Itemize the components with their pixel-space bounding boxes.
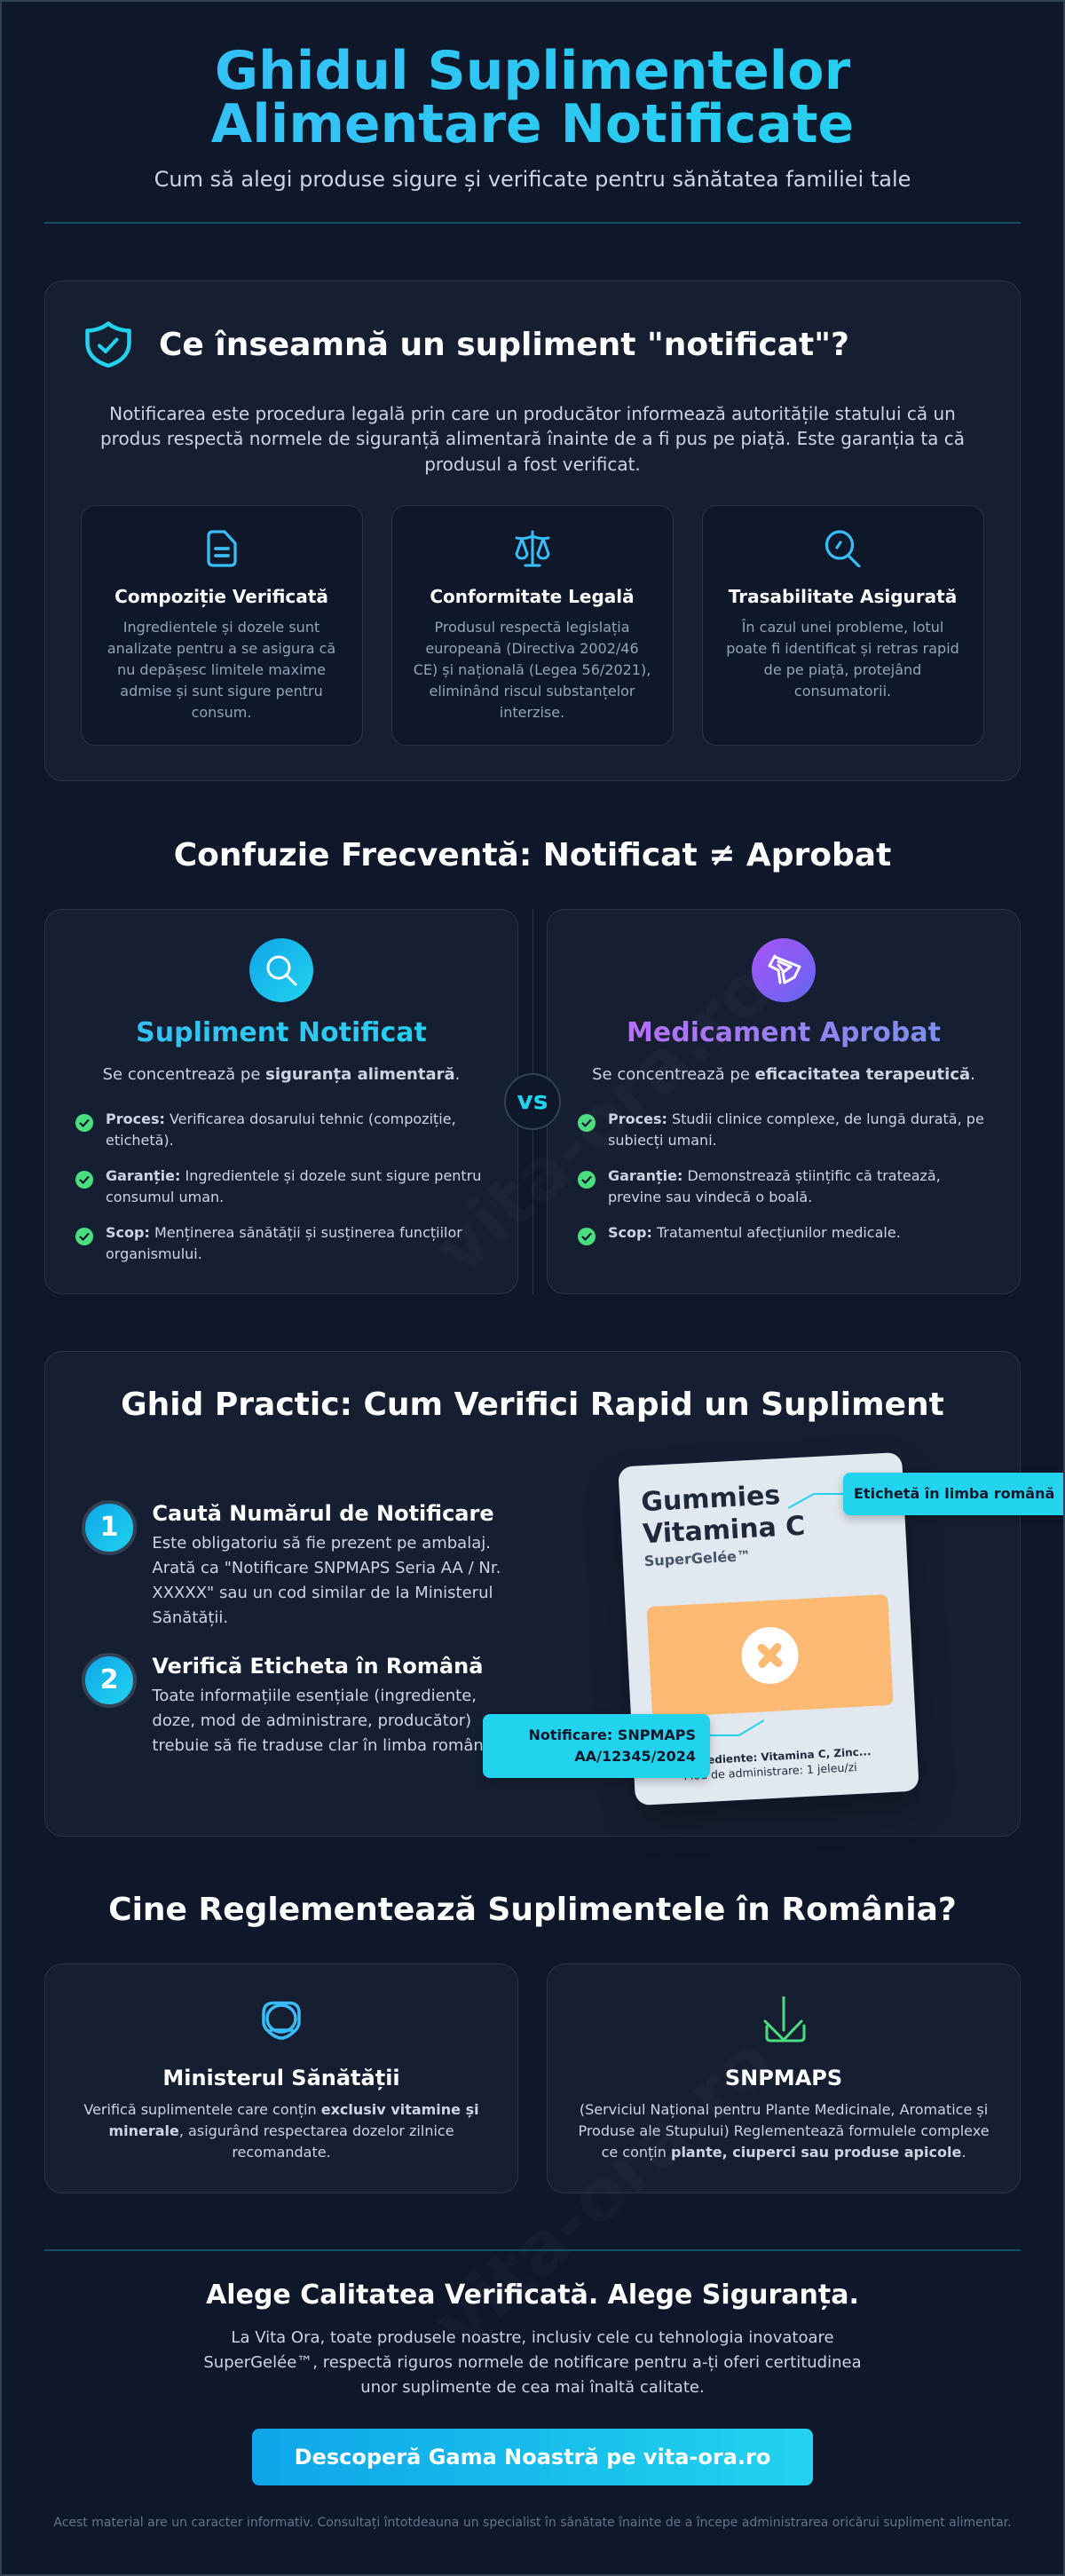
card text: Produsul respectă legislația <box>434 618 630 636</box>
step 2 text <box>152 1687 499 1755</box>
card text: analizate pentru a se asigura că <box>107 639 335 657</box>
step 1 text <box>152 1534 501 1627</box>
list item: purpose: Scop: Menținerea sănătății și susținerea funcțiilor <box>106 1223 462 1241</box>
card text: poate fi identificat și retras rapid <box>726 639 959 657</box>
card text: consumatorii. <box>794 682 891 699</box>
callout: notification number: AA/12345/2024 <box>574 1747 696 1765</box>
product label illustration <box>618 1452 919 1806</box>
product name: Gummies <box>640 1480 781 1518</box>
list item: process: etichetă). <box>106 1132 174 1149</box>
watermark top: vita-ora.ro <box>418 945 788 1291</box>
check icon 3 <box>578 1228 596 1245</box>
regulator text: Verifică suplimentele care conțin exclusiv vitamine și <box>83 2100 479 2118</box>
card: legal compliance <box>391 505 674 746</box>
product image placeholder <box>646 1594 893 1718</box>
icon: gummy badge <box>742 1627 799 1684</box>
list item: guarantee: Garanție: Ingredientele și dozele sunt sigure pentru <box>106 1166 481 1184</box>
list item: guarantee <box>106 1166 481 1205</box>
panel summary: Se concentrează pe siguranța alimentară. <box>103 1065 460 1084</box>
footer paragraph: SuperGelée™, respectă riguros normele de notificare pentru a-ți oferi certitudinea <box>203 2353 862 2372</box>
card text: consum. <box>192 703 251 721</box>
check icon 2 <box>578 1171 596 1189</box>
footer paragraph: unor suplimente de cea mai înaltă calitate. <box>360 2378 705 2397</box>
heading: practical guide: Ghid Practic: Cum Verifici Rapid un Supliment <box>121 1387 944 1422</box>
product name: Vitamina C <box>642 1510 806 1550</box>
call to action button: Descoperă Gama Noastră pe vita-ora.ro <box>295 2445 770 2469</box>
call to action button <box>252 2429 813 2485</box>
step 1 <box>82 1500 501 1627</box>
regulator text: Produse ale Stupului) Reglementează formulele complexe <box>578 2122 990 2139</box>
panel summary: Se concentrează pe eficacitatea terapeutică. <box>592 1065 975 1084</box>
card title: Compoziție Verificată <box>114 586 328 607</box>
check icon 2 <box>75 1171 93 1189</box>
regulator text <box>83 2100 479 2161</box>
footer paragraph: La Vita Ora, toate produsele noastre, inclusiv cele cu tehnologia inovatoare <box>231 2328 834 2347</box>
list item: process: Proces: Studii clinice complexe, de lungă durată, pe <box>608 1110 984 1127</box>
ingredients line: Ingrediente: Vitamina C, Zinc... <box>682 1745 871 1767</box>
callout: Romanian label <box>843 1473 1065 1515</box>
step 1 text: XXXXX" sau un cod similar de la Ministerul <box>152 1584 493 1602</box>
callout: notification number: Notificare: SNPMAPS <box>528 1726 696 1743</box>
card title: Trasabilitate Asigurată <box>729 586 957 607</box>
intro paragraph: produs respectă normele de siguranță alimentară înainte de a fi pus pe piață. Este garanția ta că <box>100 428 965 449</box>
card text: În cazul unei probleme, lotul <box>742 618 943 636</box>
step 2 text: trebuie să fie traduse clar în limba română. <box>152 1736 499 1755</box>
step 2 text: Toate informațiile esențiale (ingrediente, <box>152 1687 477 1705</box>
step 1 text: Arată ca "Notificare SNPMAPS Seria AA / Nr. <box>152 1559 501 1577</box>
panel: SNPMAPS <box>547 1964 1021 2193</box>
callout: notification number <box>483 1714 710 1778</box>
icon: medicine circle <box>752 938 816 1002</box>
intro paragraph: produsul a fost verificat. <box>424 454 641 475</box>
icon: download leaf <box>763 1996 806 2042</box>
icon: document <box>207 530 237 567</box>
list item: guarantee <box>608 1166 941 1205</box>
card text <box>107 618 335 721</box>
panel title: Medicament Aprobat <box>627 1017 941 1047</box>
panel: notified supplement <box>44 909 518 1294</box>
card text: admise și sunt sigure pentru <box>120 682 323 699</box>
check icon 1 <box>578 1114 596 1132</box>
connector: label callout <box>788 1493 843 1509</box>
icon: shield check <box>85 321 131 367</box>
list item: process <box>106 1110 456 1149</box>
panel title <box>547 1015 1021 1049</box>
step 2 text: doze, mod de administrare, producător) <box>152 1711 471 1730</box>
heading: confusion: Confuzie Frecventă: Notificat ≠ Aprobat <box>174 837 891 873</box>
step number 2: 2 <box>100 1664 118 1695</box>
panel title: Supliment Notificat <box>136 1017 427 1047</box>
step 1 text: Sănătății. <box>152 1608 228 1627</box>
regulator title: Ministerul Sănătății <box>162 2066 400 2090</box>
icon: scales <box>515 531 550 566</box>
subtitle: Cum să alegi produse sigure și verificate pentru sănătatea familiei tale <box>154 167 911 192</box>
product name <box>640 1480 806 1550</box>
callout: Romanian label: Etichetă în limba română <box>854 1485 1054 1502</box>
icon: magnifier <box>825 530 861 567</box>
step number 1 <box>82 1500 137 1555</box>
panel: what notified means <box>44 281 1021 781</box>
step number 1: 1 <box>100 1512 118 1543</box>
check icon 3 <box>75 1228 93 1245</box>
regulator text: ce conțin plante, ciuperci sau produse apicole. <box>602 2143 966 2161</box>
vs badge: vs <box>517 1086 548 1115</box>
regulator text: (Serviciul Național pentru Plante Medicinale, Aromatice și <box>580 2100 988 2118</box>
regulator title: SNPMAPS <box>725 2066 842 2090</box>
disclaimer: Acest material are un caracter informativ. Consultați întotdeauna un specialist în sănătate înainte de a începe administrarea oricărui supliment alimentar. <box>53 2516 1012 2530</box>
card text: de pe piață, protejând <box>764 660 921 678</box>
step 1 title: Caută Numărul de Notificare <box>152 1501 494 1526</box>
vs badge <box>504 1073 561 1130</box>
step 2 <box>82 1653 499 1755</box>
card: verified composition <box>81 505 363 746</box>
card text: Ingredientele și dozele sunt <box>123 618 320 636</box>
heading: regulators: Cine Reglementează Suplimentele în România? <box>108 1892 957 1928</box>
card text <box>726 618 959 699</box>
card text: nu depășesc limitele maxime <box>117 660 326 678</box>
card text <box>414 618 651 721</box>
panel: approved medicine <box>547 909 1021 1294</box>
list item: guarantee: consumul uman. <box>106 1188 224 1205</box>
list item: purpose: organismului. <box>106 1245 202 1262</box>
product brand: SuperGelée™ <box>643 1546 751 1569</box>
panel: practical guide <box>44 1351 1021 1836</box>
regulator text <box>578 2100 990 2161</box>
step 1 text: Este obligatoriu să fie prezent pe ambalaj. <box>152 1534 491 1553</box>
dosage line: Mod de administrare: 1 jeleu/zi <box>683 1760 857 1782</box>
regulator text: minerale, asigurând respectarea dozelor zilnice <box>108 2122 454 2139</box>
panel: ministry of health <box>44 1964 518 2193</box>
connector: notification callout <box>710 1719 764 1736</box>
panel title <box>44 1015 518 1049</box>
heading: what notified means: Ce înseamnă un supliment "notificat"? <box>159 327 849 363</box>
list item: guarantee: Garanție: Demonstrează științific că tratează, <box>608 1166 941 1184</box>
intro paragraph: Notificarea este procedura legală prin care un producător informează autoritățile statului că un <box>109 403 956 424</box>
card text: interzise. <box>500 703 564 721</box>
list item: process: Proces: Verificarea dosarului tehnic (compoziție, <box>106 1110 456 1127</box>
card title: Conformitate Legală <box>430 586 635 607</box>
icon: search circle <box>249 938 313 1002</box>
footer heading: Alege Calitatea Verificată. Alege Siguranța. <box>206 2280 859 2311</box>
icon: ministry <box>262 2001 301 2040</box>
list item: purpose: Scop: Tratamentul afecțiunilor medicale. <box>608 1223 901 1241</box>
list item: purpose <box>106 1223 462 1262</box>
intro paragraph <box>100 403 965 475</box>
regulator text: recomandate. <box>232 2143 331 2161</box>
card text: europeană (Directiva 2002/46 <box>425 639 639 657</box>
step 2 title: Verifică Eticheta în Română <box>152 1654 483 1679</box>
footer paragraph <box>203 2328 862 2397</box>
title <box>44 44 1021 151</box>
card text: CE) și națională (Legea 56/2021), <box>414 660 651 678</box>
card: traceability <box>702 505 984 746</box>
list item: process: subiecți umani. <box>608 1132 717 1149</box>
watermark bottom: vita-ora.ro <box>418 2019 788 2365</box>
card text: eliminând riscul substanțelor <box>429 682 635 699</box>
list item: guarantee: previne sau vindecă o boală. <box>608 1188 812 1205</box>
step number 2 <box>82 1653 137 1708</box>
list item: process <box>608 1110 984 1149</box>
check icon 1 <box>75 1114 93 1132</box>
